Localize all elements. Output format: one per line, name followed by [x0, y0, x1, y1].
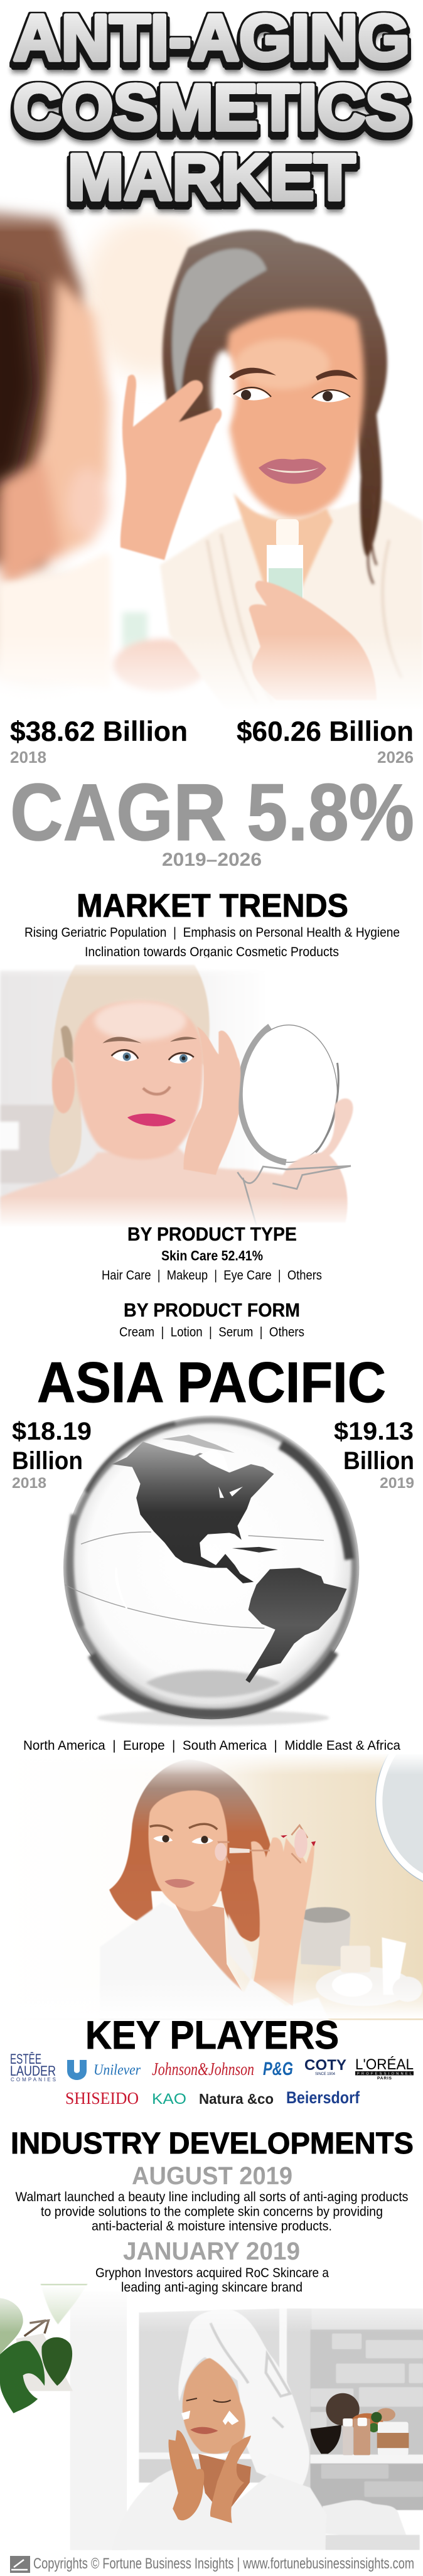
round mirror: [375, 1755, 423, 1882]
heading: market trends: MARKET TRENDS: [77, 888, 348, 924]
chest and shoulders: [0, 1147, 291, 1234]
stat: Asia Pacific 2018: $18.19: [12, 1418, 92, 1445]
date: August 2019: AUGUST 2019: [132, 2162, 292, 2190]
dark bowl: [310, 2425, 341, 2454]
bottles: [343, 2418, 353, 2455]
title: COSMETICS: [13, 72, 410, 144]
logo: Estee Lauder: LAUDER: [10, 2063, 56, 2079]
heading: industry developments: INDUSTRY DEVELOPMENTS: [11, 2127, 414, 2160]
pot, tube and dish: [316, 1937, 422, 2006]
Caribbean islands: [232, 1547, 278, 1553]
stat: 2018 market size: [10, 716, 188, 767]
face highlight: [94, 1001, 186, 1040]
ear: [52, 1057, 75, 1113]
robe: [136, 1908, 329, 2020]
stat: 2018 market size: $38.62 Billion: [10, 716, 188, 747]
Arctic islands: [162, 1435, 235, 1453]
logo: Coty: COTY: [304, 2057, 346, 2074]
robe: [112, 2469, 326, 2550]
hand holding mirror: [281, 1099, 353, 1222]
woman: face: [225, 309, 364, 517]
hair: [109, 1759, 273, 1941]
development text: Gryphon: leading anti-aging skincare brand: [121, 2280, 303, 2295]
photo fade bottom: [0, 1196, 423, 1227]
logo: Unilever: Unilever: [94, 2062, 141, 2078]
woman: hand at face: [120, 375, 222, 560]
mirror stand: [237, 1166, 351, 1226]
photo fade base: [0, 1227, 423, 1246]
nose: [143, 1087, 170, 1094]
logo: Kao: KAO: [152, 2091, 186, 2108]
woman: neck: [233, 493, 333, 603]
mirror reflection: face: [0, 276, 110, 584]
bricks: [310, 2334, 423, 2497]
woman: hair: [163, 230, 387, 584]
wall: [212, 1756, 423, 2020]
mirror: [240, 1025, 338, 1162]
hair: [49, 965, 210, 1175]
photo: woman in towel with face cream: [0, 2284, 423, 2551]
globe sphere: [63, 1415, 359, 1719]
logo: Estee Lauder: [10, 2051, 56, 2083]
heading: by product form: BY PRODUCT FORM: [124, 1299, 300, 1321]
CAGR period: 2019–2026: [162, 849, 262, 870]
heading: by product type: BY PRODUCT TYPE: [127, 1223, 297, 1245]
logo: L'Oreal Professionnel: PARIS: [377, 2076, 392, 2081]
woman: cream streak: [211, 350, 236, 428]
orange items: [351, 2413, 383, 2432]
date: January 2019: JANUARY 2019: [123, 2238, 300, 2265]
photo: woman with rose quartz roller: [109, 1755, 423, 2020]
logo: L'Oreal Professionnel: PROFESSIONNEL: [357, 2072, 412, 2076]
woman: lips: [259, 459, 326, 484]
logos: key players: [10, 2051, 414, 2108]
room background: [0, 971, 270, 1209]
stat: Asia Pacific 2018: Billion: [12, 1447, 83, 1475]
stat: Asia Pacific 2019: Billion: [343, 1447, 414, 1475]
neck: [173, 1900, 243, 1992]
title: ANTI-AGING: [13, 2, 410, 75]
towel wrap: [178, 2309, 309, 2491]
logo: Beiersdorf: Beiersdorf: [286, 2088, 360, 2107]
hand: [251, 1838, 314, 2006]
cream dabs: [181, 2411, 239, 2425]
jar: [301, 1907, 351, 1967]
heading: key players: KEY PLAYERS: [85, 2013, 339, 2057]
lips: [164, 1879, 195, 1888]
stat: 2018 market size: 2018: [10, 748, 46, 767]
logo: Estee Lauder: ESTĒE: [10, 2051, 41, 2067]
background wash: [0, 213, 220, 684]
photo fade top: [0, 957, 423, 978]
development text: Gryphon: Gryphon Investors acquired RoC Skincare a: [95, 2266, 329, 2280]
glass globe: [63, 1415, 359, 1726]
mirror reflection: robe and bottle: [0, 552, 207, 692]
logo: Fortune Business Insights: [10, 2556, 30, 2573]
title: MARKET: [68, 141, 355, 214]
stat: 2026 market size: 2026: [377, 748, 414, 767]
face: [183, 2358, 245, 2454]
heading: Asia Pacific: ASIA PACIFIC: [37, 1351, 386, 1415]
photo: woman applying cream at mirror: [0, 188, 423, 713]
development text: Walmart: to provide solutions to the complete skin concerns by providing: [41, 2205, 383, 2219]
development text: Walmart: Walmart launched a beauty line including all sorts of anti-aging products: [15, 2190, 408, 2204]
face: [73, 1001, 203, 1160]
North America: [112, 1442, 274, 1583]
photo fade top: [0, 1753, 423, 1775]
towels on shelf: [323, 2500, 420, 2550]
twine jar: [378, 2422, 409, 2455]
photo fade bottom: [0, 1978, 423, 2018]
roller: [215, 1825, 308, 1863]
top fade: [0, 188, 423, 232]
brick wall left: [70, 2317, 127, 2550]
logo: L'Oreal Professionnel: L'ORÉAL: [355, 2056, 414, 2073]
Hudson Bay and lakes: [198, 1449, 243, 1498]
shelf recess: [139, 2309, 423, 2510]
nails: [281, 1835, 316, 1846]
mirror reflection: hair: [0, 207, 82, 565]
South America: [245, 1568, 347, 1683]
title: [13, 2, 410, 214]
neck: [198, 2454, 251, 2516]
wicker ball: [326, 2393, 360, 2425]
face: [149, 1791, 227, 1911]
globe highlight: [115, 1568, 127, 1609]
logo: Estee Lauder: COMPANIES: [11, 2077, 56, 2083]
stat: Asia Pacific 2019: $19.13: [334, 1418, 414, 1445]
market trends list: [24, 925, 400, 959]
logo: Shiseido: SHISEIDO: [65, 2089, 139, 2108]
hand on temple: [183, 1027, 240, 1175]
logo: L'Oreal Professionnel: [355, 2056, 414, 2081]
stat: 2026 market size: $60.26 Billion: [237, 716, 414, 747]
product form list: Cream | Lotion | Serum | Others: [119, 1325, 304, 1340]
product type list: Hair Care | Makeup | Eye Care | Others: [102, 1268, 322, 1283]
development text: Walmart: [15, 2190, 408, 2234]
logo: Coty: SINCE 1904: [315, 2072, 336, 2076]
stat: Asia Pacific 2019: 2019: [380, 1475, 414, 1492]
closed eyes: [186, 2398, 231, 2402]
woman: hand holding bottle: [249, 581, 377, 700]
logo: Unilever: [67, 2060, 141, 2080]
stat: Asia Pacific 2018: 2018: [12, 1475, 46, 1492]
right hand: [210, 2435, 251, 2523]
shelf objects: [310, 2393, 409, 2455]
development text: Gryphon: [95, 2266, 329, 2295]
footer: [10, 2555, 414, 2573]
logo: Johnson & Johnson: Johnson&Johnson: [152, 2059, 254, 2079]
globe rim shading: [68, 1420, 355, 1715]
stat: 2026 market size: [237, 716, 414, 767]
lips: [190, 2427, 218, 2434]
leading product type: Skin Care 52.41%: [161, 1248, 263, 1263]
regions list: North America | Europe | South America | Middle East & Africa: [23, 1738, 400, 1753]
stat: Asia Pacific 2019: [334, 1418, 414, 1492]
photo: mature woman with hand mirror: [0, 965, 353, 1234]
logo: Natura & Co: Natura &co: [199, 2091, 274, 2107]
photo fade top: [0, 2285, 423, 2332]
woman: bottle: [267, 519, 303, 633]
logo: P&G: P&G: [263, 2059, 293, 2079]
market trends list: Inclination towards Organic Cosmetic Products: [85, 945, 339, 959]
plant: [0, 2284, 88, 2413]
lips: [127, 1114, 176, 1126]
development text: Walmart: anti-bacterial & moisture intensive products.: [92, 2219, 332, 2234]
bottom fade: [0, 634, 423, 713]
latitude lines: [65, 1532, 324, 1628]
eyes and brows: [150, 1824, 217, 1844]
eyes and brows: [102, 1037, 197, 1064]
stat: Asia Pacific 2018: [12, 1418, 92, 1492]
left hand: [168, 2430, 204, 2520]
globe shadow: [97, 1710, 329, 1726]
mirror reflection: dark hair: [0, 270, 41, 502]
woman: robe: [160, 496, 423, 709]
woman: eyes and brows: [229, 368, 358, 402]
